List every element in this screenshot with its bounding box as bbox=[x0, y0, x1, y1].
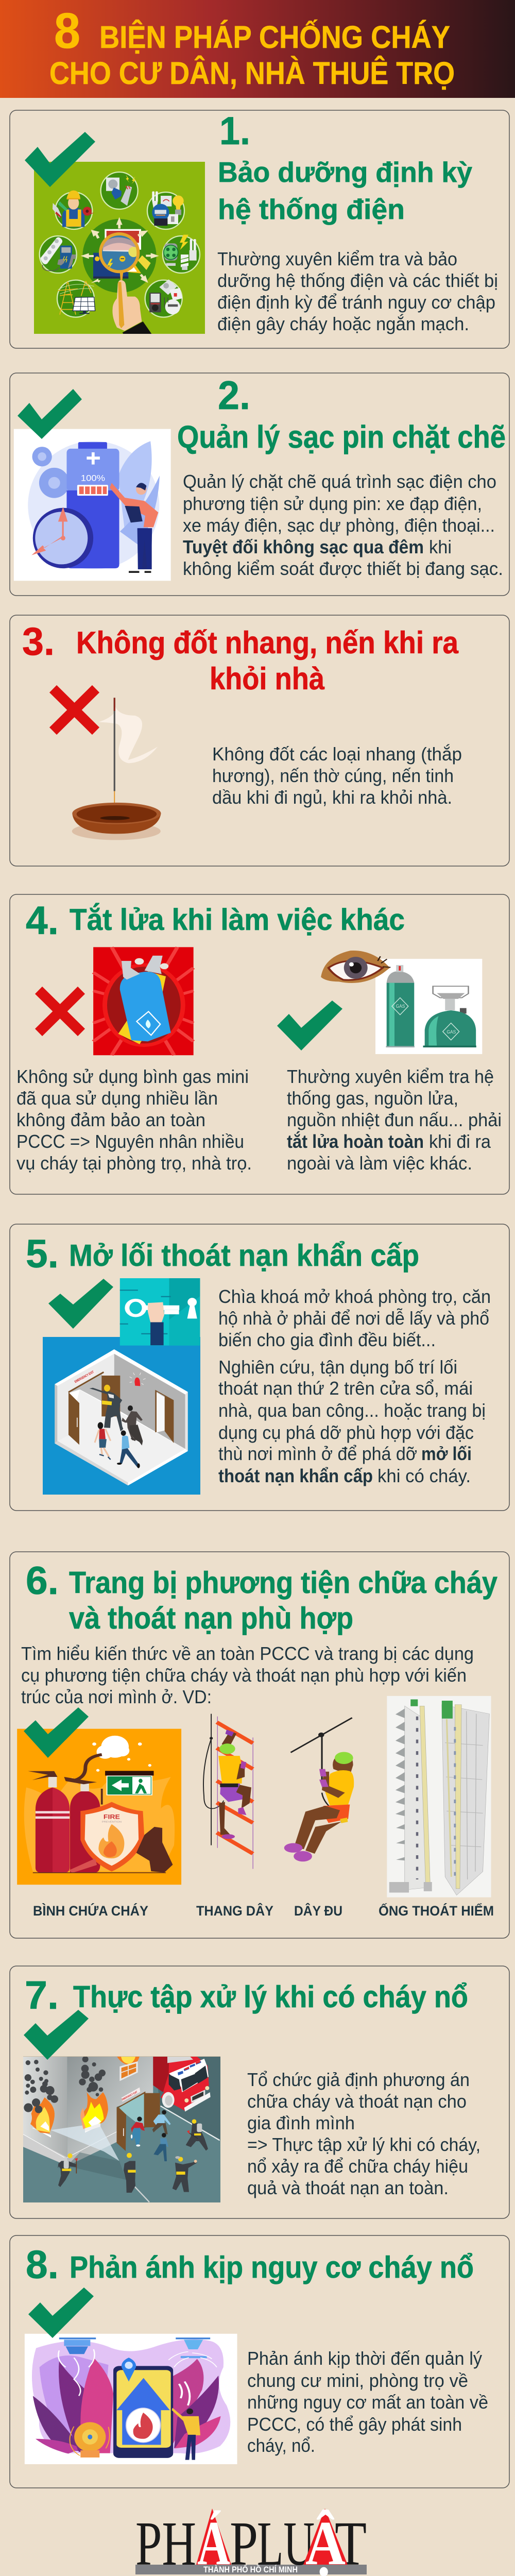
illustration: fire extinguishers: PREVENTION bbox=[102, 1821, 122, 1824]
heading: và thoát nạn phù hợp bbox=[69, 1601, 353, 1635]
body text: thù nơi mình ở để phá dỡ bbox=[218, 1443, 417, 1464]
body text: khi bbox=[429, 536, 452, 557]
body text: Thường xuyên kiểm tra và bảo bbox=[217, 248, 457, 269]
heading bbox=[218, 109, 472, 225]
intro text: cụ phương tiện chữa cháy và thoát nạn phù hợp với kiến bbox=[21, 1665, 467, 1686]
heading bbox=[25, 1973, 468, 2018]
body text bbox=[247, 2348, 488, 2456]
logo: Phap Luat: Ậ bbox=[305, 2509, 346, 2576]
check mark bbox=[24, 2010, 89, 2060]
panel: 8 report risks bbox=[10, 2235, 509, 2488]
body text: điện gây cháy hoặc ngắn mạch. bbox=[217, 313, 469, 334]
right text: khi đi ra bbox=[429, 1131, 491, 1152]
body text: cháy, nổ. bbox=[247, 2435, 315, 2456]
panel: 5 emergency exit bbox=[10, 1224, 509, 1511]
illustration: fire extinguishers: FIRE bbox=[104, 1814, 120, 1820]
illustration: gas canister and stove: GAS bbox=[447, 1030, 456, 1035]
illustration: escape tube towers bbox=[387, 1696, 491, 1897]
panel: 4 turn off fire bbox=[10, 894, 509, 1194]
heading bbox=[26, 2243, 474, 2287]
body text: thoát nạn thứ 2 trên cửa sổ, mái bbox=[218, 1378, 473, 1399]
check mark bbox=[28, 2287, 94, 2338]
intro text: Tìm hiểu kiến thức về an toàn PCCC và trang bị các dụng bbox=[21, 1643, 474, 1664]
labels bbox=[33, 1902, 494, 1919]
body text: thoát nạn khẩn cấp bbox=[218, 1465, 373, 1486]
body text: gia đình mình bbox=[247, 2112, 355, 2133]
left text: đã qua sử dụng nhiều lần bbox=[16, 1088, 218, 1109]
body text: phương tiện sử dụng pin: xe đạp điện, bbox=[183, 493, 482, 514]
body text: điện định kỳ để tránh nguy cơ chập bbox=[217, 292, 495, 313]
body text: dưỡng hệ thống điện và các thiết bị bbox=[217, 270, 498, 291]
title banner: 8 bbox=[54, 3, 80, 59]
right text: thống gas, nguồn lửa, bbox=[287, 1088, 458, 1109]
body text: Phản ánh kịp thời đến quản lý bbox=[247, 2348, 482, 2369]
body text bbox=[212, 743, 462, 808]
icon: eye bbox=[321, 951, 390, 983]
body text: biến cho gia đình đều biết... bbox=[218, 1329, 436, 1350]
title banner bbox=[0, 0, 515, 98]
right text: ngoài và làm việc khác. bbox=[287, 1153, 472, 1174]
body text: khi có cháy. bbox=[377, 1465, 471, 1486]
labels: THANG DÂY bbox=[196, 1903, 273, 1919]
heading bbox=[26, 899, 405, 943]
body text: nhà, qua ban công... hoặc trang bị bbox=[218, 1400, 486, 1421]
illustration: fire drill scene bbox=[23, 2056, 220, 2202]
check mark bbox=[277, 1001, 342, 1050]
illustration: emergency room bbox=[43, 1337, 200, 1495]
heading: Bảo dưỡng định kỳ bbox=[218, 156, 472, 188]
body text: không kiểm soát được thiết bị đang sạc. bbox=[183, 558, 503, 579]
heading: Phản ánh kịp nguy cơ cháy nổ bbox=[70, 2250, 474, 2284]
illustration: fire drill scene: EMERGENCY EXIT bbox=[122, 2091, 138, 2102]
right text: Thường xuyên kiểm tra hệ bbox=[287, 1066, 494, 1087]
cross mark bbox=[39, 990, 81, 1032]
heading: 5. bbox=[26, 1232, 59, 1276]
body text: hộ nhà ở phải để nơi dễ lấy và phổ bbox=[218, 1308, 489, 1329]
body text: PCCC, có thể gây phát sinh bbox=[247, 2414, 462, 2435]
body text: mở lối bbox=[421, 1443, 472, 1464]
heading bbox=[22, 620, 459, 696]
heading: 6. bbox=[26, 1559, 59, 1603]
heading bbox=[26, 1559, 497, 1635]
body text bbox=[217, 248, 498, 334]
left text: vụ cháy tại phòng trọ, nhà trọ. bbox=[16, 1153, 252, 1174]
labels: BÌNH CHỨA CHÁY bbox=[33, 1903, 148, 1919]
panel: 1 electrical maintenance bbox=[10, 109, 509, 348]
body text: dầu khi đi ngủ, khi ra khỏi nhà. bbox=[212, 787, 452, 808]
body text: những nguy cơ mất an toàn về bbox=[247, 2392, 488, 2413]
illustration: gas cylinders warning bbox=[93, 947, 194, 1055]
panel: 3 incense and candles bbox=[10, 615, 509, 866]
illustration: gas canister and stove bbox=[375, 959, 482, 1054]
illustration: zipline rider bbox=[284, 1718, 354, 1861]
heading: Thực tập xử lý khi có cháy nổ bbox=[73, 1980, 468, 2014]
title banner: CHO CƯ DÂN, NHÀ THUÊ TRỌ bbox=[49, 56, 455, 91]
illustration: rope ladder bbox=[203, 1714, 253, 1869]
body text bbox=[247, 2069, 480, 2198]
body text: Chìa khoá mở khoá phòng trọ, căn bbox=[218, 1286, 491, 1307]
left text bbox=[16, 1066, 252, 1174]
intro text bbox=[21, 1643, 474, 1707]
heading: khỏi nhà bbox=[210, 662, 325, 696]
heading bbox=[177, 372, 506, 454]
right text bbox=[287, 1066, 502, 1174]
left text: Không sử dụng bình gas mini bbox=[16, 1066, 249, 1087]
left text: không đảm bảo an toàn bbox=[16, 1109, 205, 1130]
panel: 2 battery charging bbox=[10, 372, 509, 596]
cross mark bbox=[53, 689, 96, 731]
right text: nguồn nhiệt đun nấu... phải bbox=[287, 1109, 502, 1130]
labels: DÂY ĐU bbox=[294, 1903, 342, 1919]
body text: chữa cháy và thoát nạn cho bbox=[247, 2091, 467, 2112]
left text: PCCC => Nguyên nhân nhiều bbox=[16, 1131, 244, 1152]
body text: Tuyệt đối không sạc qua đêm bbox=[183, 536, 424, 557]
heading: 7. bbox=[25, 1973, 59, 2018]
illustration: incense bowl bbox=[72, 698, 161, 840]
body text: Quản lý chặt chẽ quá trình sạc điện cho bbox=[183, 471, 496, 492]
check mark bbox=[25, 132, 95, 187]
check mark bbox=[24, 1707, 89, 1758]
right text: tắt lửa hoàn toàn bbox=[287, 1130, 424, 1152]
heading: hệ thống điện bbox=[218, 193, 405, 225]
heading: Mở lối thoát nạn khẩn cấp bbox=[69, 1239, 419, 1273]
panel: 7 fire drill bbox=[10, 1966, 509, 2218]
body text bbox=[218, 1286, 491, 1486]
logo: Phap Luat: THÀNH PHỐ HỒ CHÍ MINH bbox=[203, 2564, 298, 2574]
illustration: gas canister and stove: GAS bbox=[396, 1004, 405, 1009]
body text: Không đốt các loại nhang (thắp bbox=[212, 743, 462, 765]
heading: 4. bbox=[26, 899, 59, 943]
title banner: BIỆN PHÁP CHỐNG CHÁY bbox=[99, 20, 450, 55]
body text: quả và thoát nạn an toàn. bbox=[247, 2177, 449, 2198]
heading: 3. bbox=[22, 620, 55, 664]
illustration: emergency room: EMERGENCY EXIT bbox=[74, 1370, 95, 1384]
heading: 2. bbox=[218, 372, 250, 418]
illustration: fire extinguishers bbox=[17, 1729, 181, 1885]
check mark bbox=[18, 389, 82, 439]
body text: Nghiên cứu, tận dụng bố trí lối bbox=[218, 1357, 457, 1378]
heading bbox=[26, 1232, 419, 1276]
body text: nổ xảy ra để chữa cháy hiệu bbox=[247, 2156, 468, 2177]
illustration: key and keyhole bbox=[120, 1278, 200, 1346]
logo: Phap Luat: Á bbox=[197, 2509, 230, 2576]
body text: chung cư mini, phòng trọ về bbox=[247, 2370, 468, 2391]
heading: Tắt lửa khi làm việc khác bbox=[70, 903, 405, 937]
heading: 1. bbox=[219, 109, 250, 153]
body text: hương), nến thờ cúng, nến tinh bbox=[212, 765, 454, 786]
body text bbox=[183, 471, 503, 579]
body text: xe máy điện, sạc dự phòng, điện thoại... bbox=[183, 515, 495, 536]
body text: dụng cụ phá dỡ phù hợp với đặc bbox=[218, 1422, 474, 1443]
illustration: battery and clock: 100% bbox=[81, 473, 105, 483]
labels: ỐNG THOÁT HIỂM bbox=[379, 1902, 494, 1919]
illustration: electrical inspection bbox=[34, 162, 205, 334]
logo: Phap Luat bbox=[135, 2509, 367, 2576]
illustration: battery and clock bbox=[14, 429, 171, 581]
panel: 6 equipment bbox=[10, 1552, 509, 1938]
body text: => Thực tập xử lý khi có cháy, bbox=[247, 2134, 480, 2155]
heading: Không đốt nhang, nến khi ra bbox=[76, 625, 459, 660]
heading: 8. bbox=[26, 2243, 59, 2287]
body text: Tổ chức giả định phương án bbox=[247, 2069, 470, 2090]
check mark bbox=[48, 1279, 113, 1329]
intro text: trúc của nơi mình ở. VD: bbox=[21, 1686, 212, 1707]
illustration: smart fire alarm bbox=[25, 2334, 237, 2464]
